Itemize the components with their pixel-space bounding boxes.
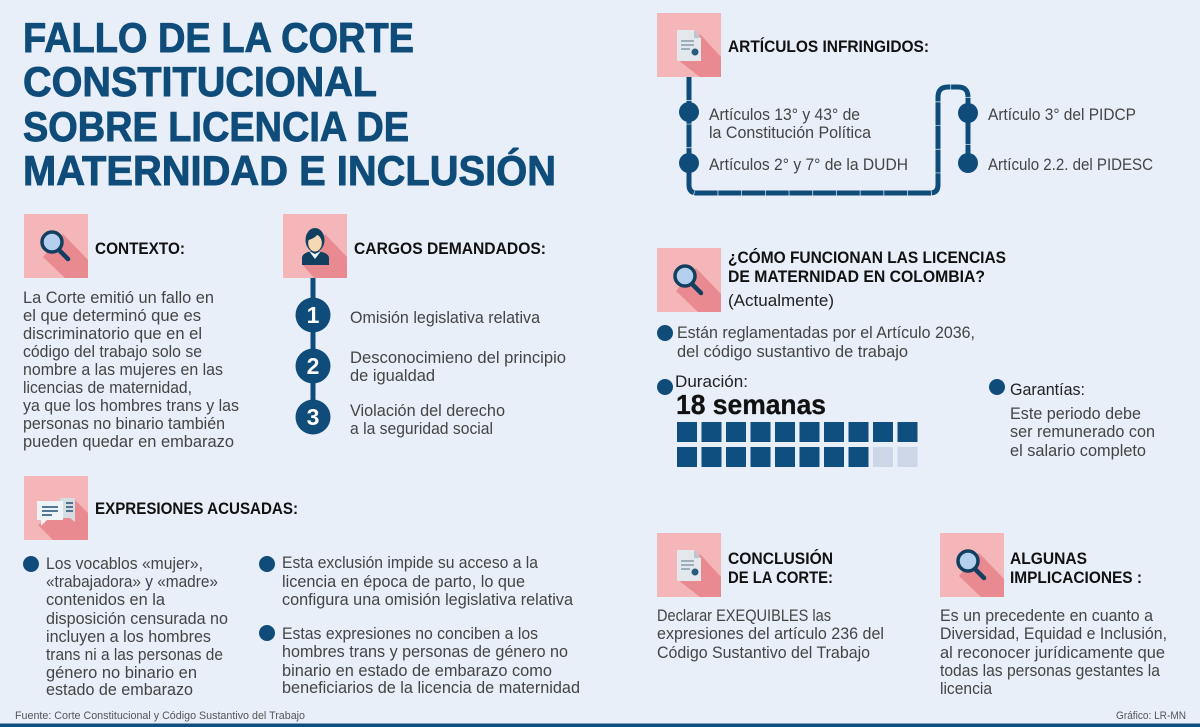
- heading: implicaciones: [1010, 549, 1142, 587]
- duración: Duración:: [675, 373, 748, 391]
- heading: contexto: CONTEXTO:: [95, 239, 185, 258]
- heading: implicaciones: IMPLICACIONES :: [1010, 568, 1142, 587]
- item 2: [296, 348, 566, 385]
- article: constitución: la Constitución Política: [709, 124, 872, 142]
- text block: conclusión: Declarar EXEQUIBLES las: [657, 607, 831, 625]
- source note: Fuente: Corte Constitucional y Código Sustantivo del Trabajo: [15, 710, 305, 722]
- text block: contexto: el que determinó que es: [23, 307, 201, 325]
- text block: conclusión: [657, 607, 884, 662]
- text block: conclusión: expresiones del artículo 236 del: [657, 625, 884, 643]
- graphic credit: Gráfico: LR-MN: [1116, 710, 1186, 722]
- bullet text: vocablos: contenidos en la: [46, 591, 166, 609]
- item 3: [296, 400, 505, 438]
- garantías: Garantías:: [1010, 381, 1085, 399]
- item 1: [296, 298, 541, 332]
- panel: artículos infringidos: [657, 13, 1153, 193]
- heading: cómo funcionan: ¿CÓMO FUNCIONAN LAS LICENCIAS: [728, 248, 1006, 267]
- heading: cómo funcionan: DE MATERNIDAD EN COLOMBIA?: [728, 267, 985, 286]
- text block: implicaciones: al reconocer jurídicamente que: [940, 644, 1165, 662]
- item 2: de igualdad: [350, 367, 435, 385]
- heading: implicaciones: ALGUNAS: [1010, 549, 1087, 568]
- text block: implicaciones: Es un precedente en cuanto a: [940, 607, 1154, 625]
- garantías: ser remunerado con: [1010, 423, 1155, 441]
- panel: expresiones acusadas: [23, 476, 580, 699]
- bullet text: vocablos: «trabajadora» y «madre»: [46, 573, 218, 591]
- item 2: Desconocimieno del principio: [350, 349, 566, 367]
- heading: conclusión: [728, 549, 833, 587]
- icon: document: [657, 533, 721, 597]
- heading: artículos infringidos: ARTÍCULOS INFRINGIDOS:: [728, 37, 929, 56]
- connector line: [689, 77, 968, 193]
- text block: implicaciones: licencia: [940, 680, 993, 698]
- bullet text: exclusión: Esta exclusión impide su acceso a la: [282, 554, 539, 572]
- text block: contexto: licencias de maternidad,: [23, 379, 192, 397]
- bullet text: estas expresiones: Estas expresiones no conciben a los: [282, 625, 538, 643]
- item 3: 3: [307, 404, 319, 430]
- icon: magnifier: [657, 248, 721, 312]
- article: PIDCP: Artículo 3° del PIDCP: [988, 106, 1136, 124]
- text block: implicaciones: todas las personas gestantes la: [940, 662, 1161, 680]
- heading: expresiones acusadas: EXPRESIONES ACUSADAS:: [95, 499, 298, 518]
- item 2: 2: [307, 353, 319, 379]
- bullet text: reglamentadas: [657, 324, 975, 361]
- panel: contexto: [23, 214, 239, 451]
- bullet text: vocablos: género no binario en: [46, 664, 197, 682]
- text block: contexto: personas no binario también: [23, 415, 225, 433]
- heading: cómo funcionan: (Actualmente): [728, 292, 834, 310]
- text block: implicaciones: [940, 607, 1167, 698]
- text block: contexto: ya que los hombres trans y las: [23, 397, 239, 415]
- bullet text: reglamentadas: del código sustantivo de trabajo: [677, 343, 908, 361]
- bullet text: vocablos: [23, 555, 228, 699]
- connector line: [310, 278, 316, 417]
- chart: 18 of 20 weeks: [677, 422, 918, 467]
- item 3: Violación del derecho: [350, 402, 505, 420]
- icon: document: [657, 13, 721, 77]
- item 3: a la seguridad social: [350, 420, 493, 438]
- icon: magnifier: [24, 214, 88, 278]
- panel: cómo funcionan las licencias: [657, 248, 1155, 467]
- panel: cargos demandados: [283, 214, 566, 438]
- bullet text: estas expresiones: [259, 625, 580, 697]
- garantías: Este periodo debe: [1010, 405, 1141, 423]
- panel: algunas implicaciones: [940, 533, 1167, 698]
- article: constitución: Artículos 13° y 43° de: [709, 106, 860, 124]
- heading: cargos demandados: CARGOS DEMANDADOS:: [354, 239, 546, 258]
- bullet text: vocablos: estado de embarazo: [46, 681, 193, 699]
- garantías: el salario completo: [1010, 442, 1146, 460]
- icon: speech bubbles: [24, 476, 88, 540]
- icon: magnifier: [940, 533, 1004, 597]
- text block: conclusión: Código Sustantivo del Trabajo: [657, 644, 870, 662]
- title: FALLO DE LA CORTE: [23, 14, 414, 61]
- heading: conclusión: DE LA CORTE:: [728, 568, 833, 587]
- text block: contexto: código del trabajo solo se: [23, 343, 202, 361]
- title: SOBRE LICENCIA DE: [23, 103, 409, 150]
- article: PIDESC: Artículo 2.2. del PIDESC: [988, 156, 1153, 174]
- title: MATERNIDAD E INCLUSIÓN: [23, 146, 556, 194]
- duración: 18 semanas: [676, 389, 826, 420]
- bullet text: exclusión: [259, 554, 574, 609]
- bullet text: exclusión: configura una omisión legislativa relativa: [282, 591, 574, 609]
- bullet text: vocablos: disposición censurada no: [46, 610, 228, 628]
- text block: contexto: pueden quedar en embarazo: [23, 433, 234, 451]
- title: CONSTITUCIONAL: [23, 58, 377, 105]
- bullet text: estas expresiones: hombres trans y personas de género no: [282, 643, 568, 661]
- text block: contexto: nombre a las mujeres en las: [23, 361, 223, 379]
- text block: implicaciones: Diversidad, Equidad e Inclusión,: [940, 625, 1167, 643]
- bullet text: vocablos: incluyen a los hombres: [46, 628, 211, 646]
- heading: conclusión: CONCLUSIÓN: [728, 549, 833, 568]
- article: PIDESC: [958, 153, 1153, 174]
- item 1: Omisión legislativa relativa: [350, 309, 541, 327]
- bottom bar: [0, 724, 1200, 727]
- bullet text: vocablos: Los vocablos «mujer»,: [46, 555, 203, 573]
- bullet text: vocablos: trans ni a las personas de: [46, 646, 223, 664]
- bullet text: estas expresiones: binario en estado de embarazo como: [282, 662, 552, 680]
- article: PIDCP: [958, 103, 1136, 124]
- text block: contexto: La Corte emitió un fallo en: [23, 289, 214, 307]
- bullet text: reglamentadas: Están reglamentadas por el Artículo 2036,: [677, 324, 975, 342]
- bullet text: exclusión: licencia en época de parto, lo que: [282, 573, 525, 591]
- heading: cómo funcionan: [728, 248, 1006, 310]
- item 1: 1: [307, 302, 320, 328]
- title: [23, 14, 556, 194]
- panel: conclusión de la corte: [657, 533, 884, 662]
- text block: contexto: discriminatorio que en el: [23, 325, 202, 343]
- article: constitución: [679, 102, 872, 142]
- duración: [657, 373, 918, 467]
- icon: person: [283, 214, 347, 278]
- article: DUDH: Artículos 2° y 7° de la DUDH: [709, 156, 908, 174]
- text block: contexto: [23, 289, 239, 451]
- bullet text: estas expresiones: beneficiarios de la licencia de maternidad: [282, 679, 580, 697]
- garantías: [989, 379, 1155, 460]
